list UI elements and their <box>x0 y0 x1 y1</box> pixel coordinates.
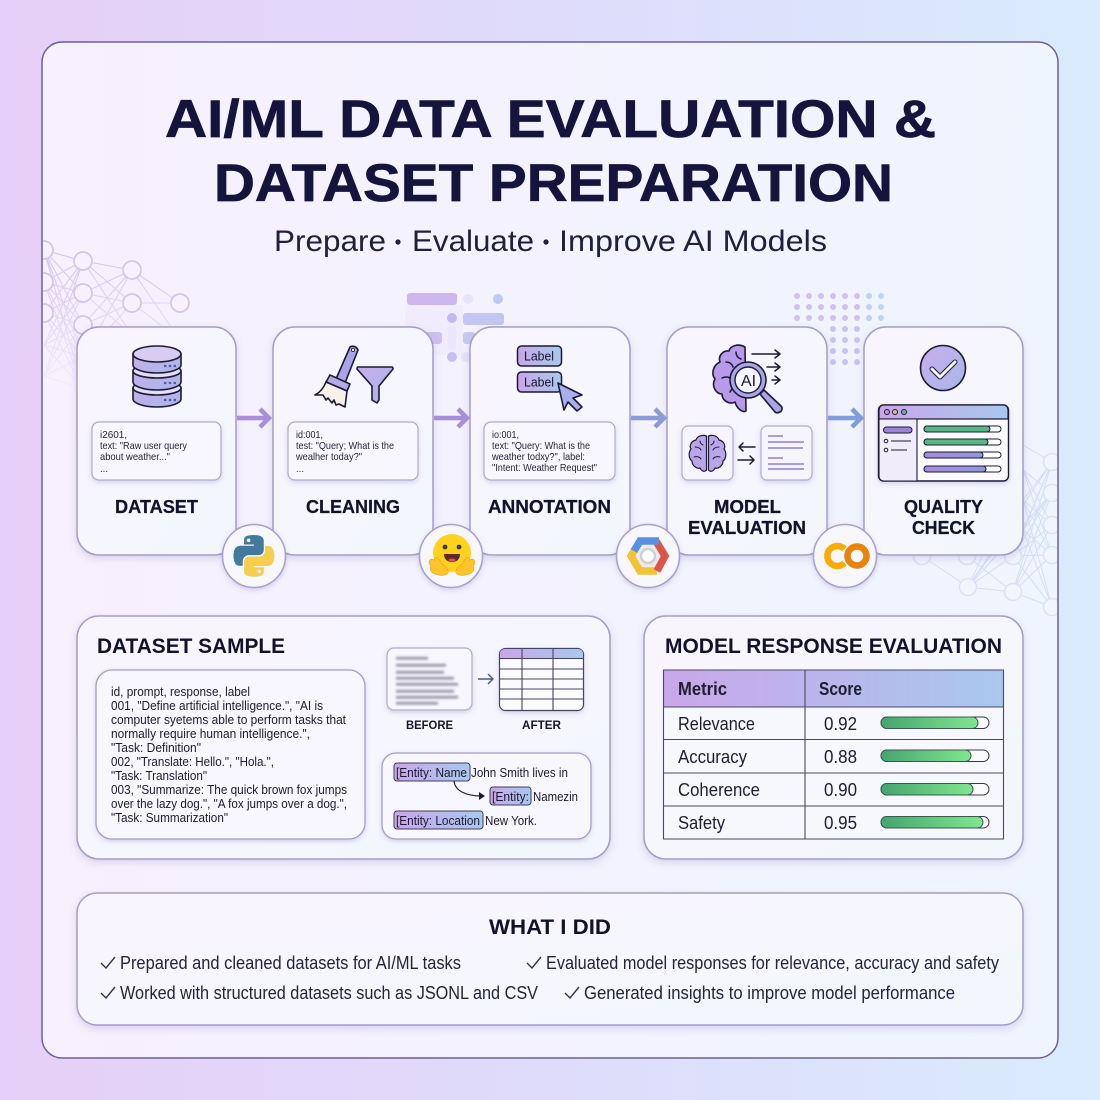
label: after: AFTER <box>522 718 561 732</box>
text block: csv sample <box>96 670 365 839</box>
panel: model evaluation step <box>667 327 827 555</box>
text block: annotated record <box>484 422 615 480</box>
text block: csv sample: computer syetems able to perform tasks that <box>111 712 346 727</box>
row: relevance <box>678 713 989 734</box>
text block: raw record: i2601, <box>100 429 127 441</box>
icon: exchange arrows <box>738 443 755 464</box>
panel: model response evaluation <box>644 616 1023 859</box>
panel: annotation step <box>470 327 630 555</box>
background: right neural network <box>914 445 1060 616</box>
label: model evaluation <box>688 497 806 538</box>
text block: csv sample: id, prompt, response, label <box>111 684 250 699</box>
panel: what I did <box>77 893 1023 1025</box>
entity annotation card: New York. <box>485 813 537 828</box>
bullet: prepared datasets: Prepared and cleaned datasets for AI/ML tasks <box>120 953 461 973</box>
panel: quality check step <box>864 327 1023 555</box>
icon: document card <box>761 426 812 480</box>
label: quality check: CHECK <box>912 518 975 538</box>
text block: raw record <box>92 422 221 480</box>
icon: brain with AI magnifier: AI <box>741 373 756 390</box>
arrow: annotation to model evaluation <box>631 409 664 427</box>
text block: csv sample: normally require human intelligence.", <box>111 726 310 741</box>
entity annotation card: [Entity: <box>492 789 529 804</box>
text block: raw record: about weather..." <box>100 451 170 463</box>
text block: csv sample: 001, "Define artificial intelligence.", "AI is <box>111 698 323 713</box>
icon: label chips with cursor: Label <box>524 376 554 390</box>
score table <box>664 670 1004 839</box>
background: pale table decoration <box>405 293 504 362</box>
after: structured table <box>500 648 584 732</box>
text block: raw record: ... <box>100 463 108 475</box>
text block: csv sample: "Task: Translation" <box>111 768 207 783</box>
background: dot grid decoration <box>794 293 884 365</box>
bullet: structured datasets: Worked with structured datasets such as JSONL and CSV <box>120 983 538 1003</box>
panel: cleaning step <box>273 327 433 555</box>
arrow: cleaning to annotation <box>434 409 467 427</box>
entity annotation card <box>382 753 591 839</box>
row: safety: Safety <box>678 812 726 833</box>
text block: annotated record: text: "Query: What is the <box>492 440 590 452</box>
row: accuracy: Accuracy <box>678 746 748 767</box>
heading: what I did: WHAT I DID <box>489 916 611 939</box>
label: annotation: ANNOTATION <box>488 497 611 517</box>
arrow: dataset to cleaning <box>237 409 269 427</box>
title: AI/ML DATA EVALUATION & <box>165 90 936 149</box>
before: blurred text card <box>387 648 472 732</box>
row: safety <box>678 812 989 833</box>
label: model evaluation: MODEL <box>714 497 781 517</box>
entity annotation card: [Entity: Name <box>396 765 467 780</box>
panel: dataset step <box>77 327 236 555</box>
text block: cleaned record: test: "Query; What is the <box>296 440 394 452</box>
row: coherence: Coherence <box>678 779 760 800</box>
panel: dataset sample <box>77 616 610 859</box>
score table: Metric <box>678 678 727 699</box>
text block: cleaned record: id:001, <box>296 429 323 441</box>
icon: colab logo <box>814 524 876 588</box>
entity annotation card: [Entity: Location <box>396 813 480 828</box>
subtitle: Improve AI Models <box>559 225 827 258</box>
bullet: evaluated responses: Evaluated model responses for relevance, accuracy and safety <box>546 953 999 973</box>
background: left neural network <box>43 240 190 372</box>
subtitle <box>274 225 827 258</box>
text block: annotated record: weather todxy?", label: <box>491 451 585 463</box>
text block: csv sample: "Task: Summarization" <box>111 810 228 825</box>
arrow: before to after <box>478 674 493 684</box>
icon: quality dashboard window <box>878 405 1008 481</box>
label: cleaning: CLEANING <box>306 497 400 517</box>
heading: model response evaluation: MODEL RESPONSE EVALUATION <box>665 635 1002 658</box>
icon: python logo <box>222 524 286 588</box>
row: coherence <box>678 779 989 800</box>
icon: brain with AI magnifier <box>713 345 782 413</box>
icon: brush and funnel <box>315 346 393 407</box>
entity annotation card: John Smith lives in <box>471 765 568 780</box>
icon: check badge <box>920 346 966 390</box>
label: dataset: DATASET <box>115 497 198 517</box>
label: model evaluation: EVALUATION <box>688 518 806 538</box>
icon: database <box>133 346 181 407</box>
title: DATASET PREPARATION <box>214 154 893 213</box>
icon: label chips with cursor: Label <box>524 350 554 364</box>
title <box>165 90 936 213</box>
text block: cleaned record <box>288 422 418 480</box>
text block: csv sample: "Task: Definition" <box>111 740 201 755</box>
subtitle: Prepare <box>274 225 386 258</box>
arrow: model evaluation to quality check <box>828 409 861 427</box>
text block: raw record: text: "Raw user query <box>100 440 188 452</box>
label: quality check <box>904 497 983 538</box>
text block: cleaned record: wealher today?" <box>295 451 362 463</box>
heading: dataset sample: DATASET SAMPLE <box>97 635 285 658</box>
row: accuracy <box>678 746 989 767</box>
score table: Score <box>819 678 862 699</box>
text block: csv sample: over the lazy dog.", "A fox jumps over a dog.", <box>111 796 347 811</box>
entity annotation card: Namezin <box>533 789 578 804</box>
subtitle: Evaluate <box>412 225 534 258</box>
row: relevance: Relevance <box>678 713 755 734</box>
text block: annotated record: io:001, <box>492 429 519 441</box>
bullet: generated insights: Generated insights to improve model performance <box>584 983 955 1003</box>
text block: csv sample: 002, "Translate: Hello.", "Hola.", <box>111 754 274 769</box>
row: relevance: 0.92 <box>824 713 857 734</box>
icon: label chips with cursor <box>518 346 582 411</box>
icon: google cloud logo <box>616 524 680 588</box>
icon: hugging face logo <box>420 524 482 588</box>
row: coherence: 0.90 <box>824 779 857 800</box>
icon: brain card <box>682 426 733 480</box>
text block: annotated record: "Intent: Weather Request" <box>492 462 597 474</box>
text block: csv sample: 003, "Summarize: The quick brown fox jumps <box>111 782 347 797</box>
row: safety: 0.95 <box>824 812 857 833</box>
label: before: BEFORE <box>406 718 453 732</box>
text block: cleaned record: ... <box>296 463 304 475</box>
row: accuracy: 0.88 <box>824 746 857 767</box>
label: quality check: QUALITY <box>904 497 983 517</box>
